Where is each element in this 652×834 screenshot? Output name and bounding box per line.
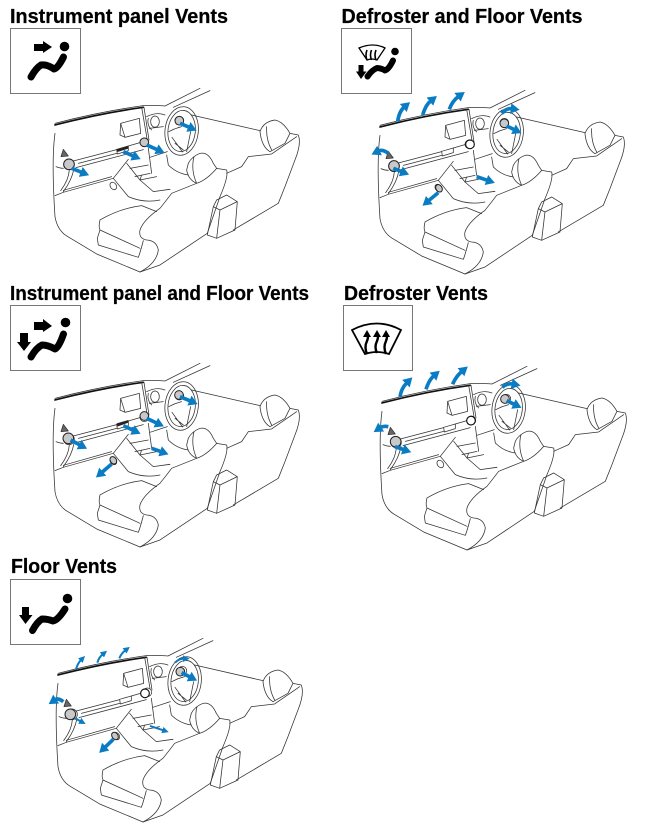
car interior diagram with airflow arrows xyxy=(378,90,624,274)
panel: defroster and floor vents xyxy=(342,6,624,274)
car interior diagram with airflow arrows xyxy=(53,88,299,272)
heading: defroster and floor vents: Defroster and Floor Vents xyxy=(342,6,582,28)
icon: person with right and down arrows xyxy=(10,306,80,370)
icon: windshield, person and down arrow xyxy=(342,28,412,94)
heading: instrument panel vents: Instrument panel Vents xyxy=(10,6,228,28)
panel: instrument panel vents xyxy=(10,6,299,272)
icon: windshield defroster xyxy=(344,306,412,370)
car interior diagram with airflow arrows xyxy=(53,363,299,547)
panel: defroster vents xyxy=(344,283,626,550)
car interior diagram with airflow arrows xyxy=(380,366,626,550)
icon: person with right arrow xyxy=(10,28,80,94)
panel: floor vents xyxy=(10,556,302,822)
car interior diagram with airflow arrows xyxy=(55,638,302,822)
icon: person with down arrow xyxy=(10,580,80,644)
heading: floor vents: Floor Vents xyxy=(11,556,117,578)
heading: instrument panel and floor vents: Instrument panel and Floor Vents xyxy=(10,283,309,305)
panel: instrument panel and floor vents xyxy=(10,283,309,547)
heading: defroster vents: Defroster Vents xyxy=(344,283,488,305)
